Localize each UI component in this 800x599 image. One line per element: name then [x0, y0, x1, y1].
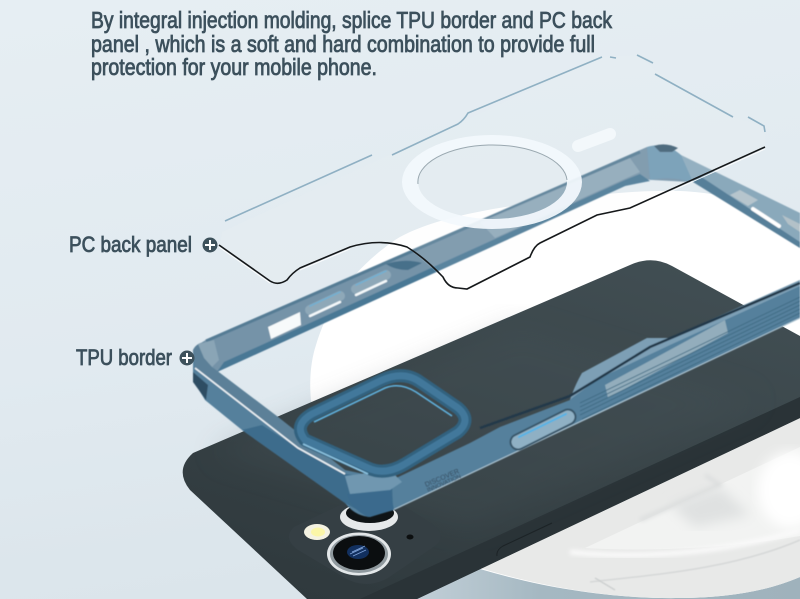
- PC back panel: [219, 55, 765, 289]
- mesh texture: [605, 320, 728, 398]
- TPU border frame: INNOVATION: [426, 474, 462, 494]
- panel tint: [220, 55, 765, 289]
- main lens: [327, 532, 391, 576]
- label: TPU border: TPU border: [76, 345, 172, 370]
- top rail: [196, 147, 690, 372]
- marble pattern: [470, 412, 800, 598]
- right rail slit: [753, 209, 779, 226]
- alignment pill: [578, 134, 610, 146]
- hatch lines: [580, 297, 800, 419]
- camera module: [289, 496, 441, 584]
- camera bump: [289, 496, 441, 584]
- heading text: panel , which is a soft and hard combination to provide full: [91, 31, 595, 57]
- reflections: [210, 325, 760, 530]
- heading text: protection for your mobile phone.: [91, 54, 377, 80]
- dark phone body: [183, 260, 800, 599]
- upper lens peeking: [340, 503, 398, 531]
- right rail: [681, 155, 800, 248]
- lower outline: [219, 147, 765, 289]
- top corner: [647, 145, 697, 182]
- MagSafe ring: [402, 135, 582, 229]
- DISCOVER INNOVATION mark: DISCOVER: [424, 468, 460, 489]
- phone side band: [360, 397, 800, 599]
- icon: plus marker TPU border: [180, 350, 194, 366]
- bottom rail: [372, 280, 800, 510]
- left rail: [193, 342, 393, 517]
- icon: plus marker PC back panel: [202, 238, 218, 252]
- TPU border frame: [193, 144, 800, 517]
- camera cutout ring: [300, 376, 465, 474]
- phone back face: [183, 260, 800, 599]
- corner cap: [347, 488, 394, 517]
- heading text: [91, 7, 612, 80]
- microphone dot: [406, 534, 414, 540]
- white circular stand: [310, 191, 800, 598]
- bottom rail button: [518, 414, 568, 442]
- upper outline: [225, 55, 765, 221]
- side button recess: [497, 523, 552, 556]
- label: PC back panel: PC back panel: [69, 232, 192, 257]
- heading text: By integral injection molding, splice TPU border and PC back: [91, 7, 612, 33]
- flash: [304, 524, 330, 540]
- side openings: [268, 312, 301, 339]
